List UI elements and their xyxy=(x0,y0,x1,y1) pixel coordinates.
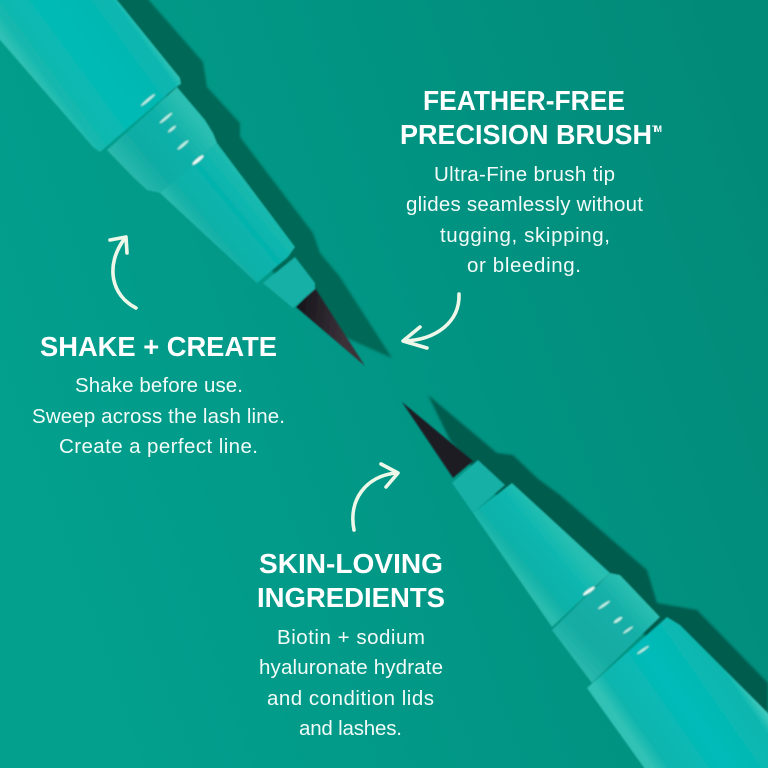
body copy: Shake before use. xyxy=(75,374,243,397)
heading: precision brush: PRECISION BRUSH xyxy=(400,119,652,150)
nib holder xyxy=(452,460,505,513)
body copy: hyaluronate hydrate xyxy=(259,656,443,679)
body copy: and condition lids xyxy=(267,687,434,710)
trademark mark: TM xyxy=(652,124,662,134)
body copy: tugging, skipping, xyxy=(440,224,610,247)
top pen xyxy=(0,0,365,366)
text block: feather-free precision brush xyxy=(400,85,662,277)
body copy: Ultra-Fine brush tip xyxy=(434,163,615,186)
body copy xyxy=(32,374,285,458)
pen body xyxy=(587,617,768,768)
text block: shake + create xyxy=(32,331,285,458)
heading: skin-loving: SKIN-LOVING xyxy=(259,548,443,579)
arrow: skin-loving ingredients xyxy=(353,464,398,530)
collar highlights xyxy=(582,586,649,655)
bottom pen xyxy=(402,402,768,768)
body copy: glides seamlessly without xyxy=(406,193,643,216)
heading: ingredients: INGREDIENTS xyxy=(257,582,445,613)
tapered section xyxy=(473,483,610,627)
body copy: or bleeding. xyxy=(467,254,581,277)
ribbed collar xyxy=(552,573,660,683)
body copy xyxy=(406,163,643,277)
tapered section xyxy=(160,143,295,283)
arrow: shake + create xyxy=(110,237,136,308)
heading: feather-free: FEATHER-FREE xyxy=(423,85,625,116)
body copy: Create a perfect line. xyxy=(59,435,258,458)
collar highlights xyxy=(140,93,204,166)
top pen shadow xyxy=(113,0,392,358)
text block: skin-loving ingredients xyxy=(257,548,445,740)
ribbed collar xyxy=(107,87,217,193)
nib holder xyxy=(263,257,315,308)
arrow: precision brush xyxy=(403,294,459,348)
heading: SHAKE + CREATE xyxy=(40,331,277,362)
body copy: and lashes. xyxy=(299,717,402,740)
body copy: Biotin + sodium xyxy=(277,626,425,649)
pen body xyxy=(0,0,181,152)
body copy xyxy=(259,626,443,740)
brush tip xyxy=(296,288,365,366)
bottom pen shadow xyxy=(428,395,768,760)
body copy: Sweep across the lash line. xyxy=(32,405,285,428)
brush tip xyxy=(402,402,473,478)
